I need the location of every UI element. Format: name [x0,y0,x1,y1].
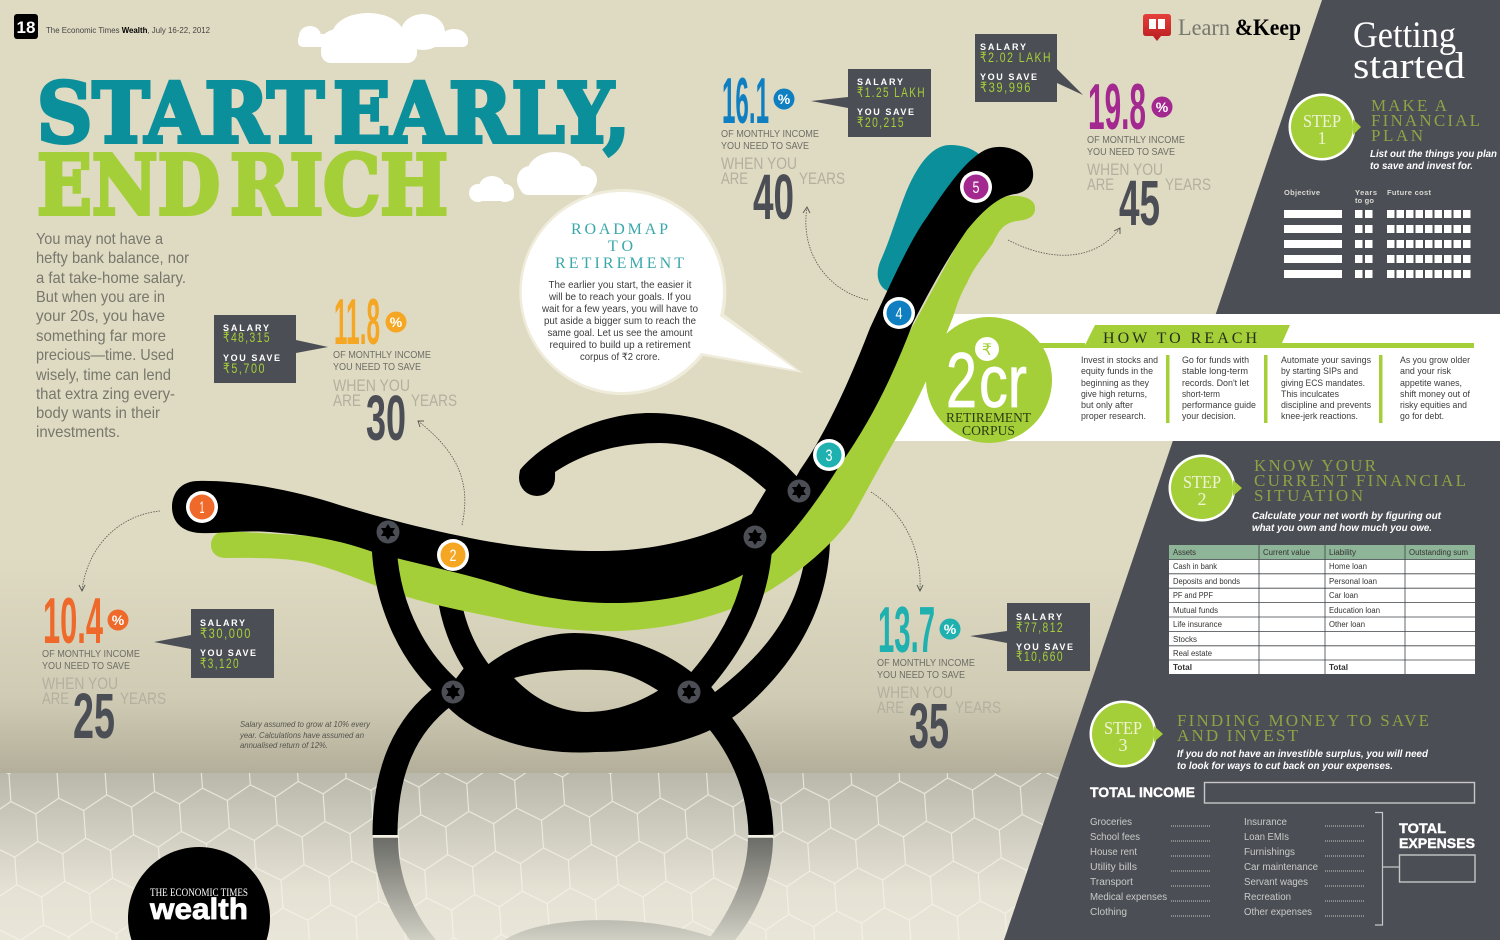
salary callout [214,315,328,383]
column 4 [1400,355,1470,422]
column dividers [1166,355,1382,423]
net worth table: Education loan [1329,606,1380,615]
arrow 3 [871,492,923,591]
net worth table: Car loan [1329,591,1358,600]
bracket [1375,812,1399,925]
cloud: mid right [517,152,597,195]
column 1: beginning as they [1081,378,1149,389]
intro text: that extra zing every- [36,386,175,403]
column 1: Invest in stocks and [1081,355,1158,366]
page tag: 18 [17,18,35,37]
description: YOU NEED TO SAVE [1087,147,1175,158]
green heading ribbon [1040,325,1474,348]
step 2 [1168,454,1475,674]
roadmap speech bubble: corpus of ₹2 crore. [580,352,660,363]
column 4: shift money out of [1400,389,1470,400]
marker 2 [437,539,469,571]
net worth table: Mutual funds [1173,606,1218,615]
salary callout: ₹30,000 [200,625,252,641]
intro text: But when you are in [36,289,165,306]
heading: getting started: started [1353,46,1466,87]
expense list: Other expenses [1244,907,1312,918]
net worth table: Stocks [1173,635,1197,644]
roadmap speech bubble: wait for a few years, you will have to [541,304,698,315]
corpus badge: CORPUS [962,424,1015,439]
intro text: investments. [36,424,120,441]
roadmap speech bubble: will be to reach your goals. If you [548,292,691,303]
percent badge [386,312,406,332]
column 3: This inculcates [1281,389,1339,400]
column 4: appetite wanes, [1400,378,1462,389]
intro text: precious—time. Used [36,347,174,364]
description [1087,135,1185,158]
step heading: FINANCIAL [1371,111,1480,130]
column 1: give high returns, [1081,389,1147,400]
stat: age 30 [214,285,457,454]
percent badge [774,88,794,110]
description: OF MONTHLY INCOME [1087,135,1185,146]
net worth table: Total [1329,663,1348,672]
total expenses: TOTAL [1399,820,1446,836]
salary callout: YOU SAVE [223,353,280,363]
age: YEARS [411,391,457,410]
net worth table: Assets [1173,548,1196,557]
net worth table: Life insurance [1173,620,1223,629]
corpus badge: RETIREMENT [946,411,1031,426]
step heading [1177,711,1429,745]
step description: Calculate your net worth by figuring out [1252,511,1442,522]
total income [1090,782,1474,803]
roadmap speech bubble: ROADMAP [571,221,668,238]
stat: age 35: 13.7 [878,593,935,666]
total income: TOTAL INCOME [1090,784,1195,800]
plan table headers [1284,188,1432,205]
stat: age 35 [877,593,1090,762]
age: 25 [73,680,115,752]
lower ring and rear arc [440,530,830,753]
plan table headers: Years [1355,188,1377,197]
roadmap speech bubble: TO [608,238,633,255]
roadmap speech bubble [519,189,803,395]
step description [1370,149,1497,172]
net worth table: Other loan [1329,620,1365,629]
column 1: proper research. [1081,411,1146,422]
age: WHEN YOU [333,376,410,395]
bench rear legs and seat backing [440,413,830,753]
rupee icon: ₹ [982,342,992,359]
stat: age 40: 16.1 [722,64,769,137]
stat: age 25: 10.4 [43,584,103,657]
column 1 [1081,355,1158,422]
dark sidebar panel [1004,0,1500,940]
percent badge: % [390,314,403,330]
column 2: performance guide [1182,400,1256,411]
learn and keep logo: &Keep [1235,15,1301,40]
salary callout [811,69,931,137]
age [42,674,166,752]
salary callout [975,34,1083,102]
description: YOU NEED TO SAVE [42,661,130,672]
marker 1 [186,491,218,523]
step 3 [1090,700,1475,925]
expense list: Medical expenses [1090,892,1167,903]
note: year. Calculations have assumed an [239,731,365,740]
net worth table: Home loan [1329,562,1367,571]
percent badge: % [112,612,125,628]
arrow 4 [803,207,868,300]
net worth table: Outstanding sum [1409,548,1468,557]
expense list: Groceries [1090,817,1132,828]
age: ARE [42,689,69,708]
bench reflection [373,838,773,940]
step badge: STEP [1303,111,1341,131]
marker 2: 2 [450,546,456,565]
step badge [1090,700,1163,768]
description [721,129,819,152]
cloud: mid small [469,176,514,202]
cloud: top [298,13,468,63]
title: RICH [230,138,448,234]
salary callout: ₹1.25 LAKH [857,84,926,100]
age: WHEN YOU [42,674,118,693]
tiled floor [0,773,1500,940]
age: 40 [753,161,794,233]
stat: age 45: 19.8 [1088,70,1146,143]
description [877,658,975,681]
step badge: 1 [1318,128,1326,148]
salary callout [154,609,274,678]
step heading [1371,96,1480,145]
age: ARE [333,391,361,410]
step heading: KNOW YOUR [1254,456,1377,475]
description: OF MONTHLY INCOME [42,649,140,660]
wealth logo [128,847,270,940]
arrow 2 [418,421,465,525]
percent badge: % [1156,99,1169,115]
column 4: and your risk [1400,366,1451,377]
arrow 1 [79,511,160,591]
page tag [14,14,211,39]
marker 5: 5 [972,178,980,197]
wealth logo: wealth [149,893,248,926]
bench bolts [376,480,810,704]
step 1 [1284,94,1497,278]
wealth logo: THE ECONOMIC TIMES [150,887,248,899]
column 2: short-term [1182,389,1220,400]
heading text: HOW TO REACH [1103,330,1257,347]
salary callout: YOU SAVE [857,107,914,117]
salary callout: ₹77,812 [1016,619,1064,635]
step heading: CURRENT FINANCIAL [1254,471,1466,490]
learn and keep logo: Learn [1178,15,1230,40]
age: YEARS [799,169,845,188]
net worth table: Real estate [1173,649,1213,658]
step badge [1288,94,1361,160]
title: START [37,66,324,162]
net worth table: Personal loan [1329,577,1377,586]
salary callout: YOU SAVE [1016,642,1073,652]
salary callout: ₹48,315 [223,329,271,345]
marker 3 [813,439,845,471]
description: OF MONTHLY INCOME [877,658,975,669]
age: WHEN YOU [1087,160,1163,179]
step description [1177,749,1429,772]
expense list: Transport [1090,877,1133,888]
step badge: 3 [1118,735,1128,755]
expense list: School fees [1090,832,1140,843]
salary callout: YOU SAVE [980,72,1037,82]
note: annualised return of 12%. [240,741,328,750]
age [877,683,1001,762]
column 2: stable long-term [1182,366,1248,377]
age: YEARS [120,689,166,708]
plan table rows [1284,210,1470,278]
marker 3: 3 [826,446,832,465]
teal backrest slat [878,145,980,292]
stat: age 25 [42,584,274,752]
corpus badge: 2 [946,336,977,424]
how to reach band [880,314,1500,441]
expense list: House rent [1090,847,1137,858]
learn and keep logo [1143,14,1301,41]
salary callout: ₹2.02 LAKH [980,49,1052,65]
icon: book [1143,14,1171,41]
column 2: Go for funds with [1182,355,1249,366]
roadmap speech bubble: RETIREMENT [555,255,684,272]
step heading [1254,456,1466,505]
roadmap speech bubble: The earlier you start, the easier it [548,280,692,291]
intro text: a fat take-home salary. [36,270,186,287]
net worth table: Cash in bank [1173,562,1218,571]
column 3: discipline and prevents [1281,400,1371,411]
step description: to save and invest for. [1370,161,1473,172]
age: WHEN YOU [721,154,797,173]
description: OF MONTHLY INCOME [333,350,431,361]
column 3: knee-jerk reactions. [1281,411,1358,422]
stat: age 40 [721,64,931,233]
note: Salary assumed to grow at 10% every [240,720,371,729]
marker 4: 4 [896,304,902,323]
column 4: risky equities and [1400,400,1467,411]
marker 5 [960,171,992,203]
column 2: your decision. [1182,411,1236,422]
intro text: body wants in their [36,405,161,422]
expense list: Clothing [1090,907,1127,918]
expense list: Utility bills [1090,862,1137,873]
net worth table: Current value [1263,548,1311,557]
description: YOU NEED TO SAVE [333,362,421,373]
net worth table [1169,545,1475,674]
note [239,720,371,750]
plan table headers: Objective [1284,188,1320,197]
salary callout [970,603,1090,671]
expense list [1090,817,1365,918]
expense list: Car maintenance [1244,862,1318,873]
age: ARE [877,698,904,717]
heading: getting started [1353,15,1466,87]
column 2 [1182,355,1256,422]
salary callout: SALARY [980,42,1026,52]
description: OF MONTHLY INCOME [721,129,819,140]
step badge: 2 [1198,489,1206,509]
description: YOU NEED TO SAVE [877,670,965,681]
arrow 5 [1008,228,1120,255]
salary callout: ₹3,120 [200,655,240,671]
column 3: giving ECS mandates. [1281,378,1365,389]
age [1087,160,1211,239]
step description: List out the things you plan [1370,149,1497,160]
column 2: records. Don't let [1182,378,1249,389]
description [42,649,140,672]
inner leg [448,590,490,684]
total expenses: EXPENSES [1399,835,1475,851]
expense list: Insurance [1244,817,1287,828]
percent badge [108,610,128,630]
armrest [519,413,800,525]
plan table headers: to go [1355,196,1374,205]
step heading: PLAN [1371,126,1423,145]
intro text: your 20s, you have [36,308,165,325]
net worth table: Liability [1329,548,1356,557]
column 3: Automate your savings [1281,355,1371,366]
corpus badge: cr [979,340,1027,423]
percent badge: % [944,621,957,637]
salary callout: ₹39,996 [980,79,1032,95]
upper ring band [470,633,695,695]
salary callout: ₹5,700 [223,360,266,376]
step heading: AND INVEST [1177,726,1299,745]
salary callout: ₹20,215 [857,114,905,130]
expense list: Recreation [1244,892,1291,903]
column 1: equity funds in the [1081,366,1153,377]
salary callout: SALARY [223,323,269,333]
stat: age 30: 11.8 [334,285,380,358]
age: 30 [366,382,406,454]
age: YEARS [1165,175,1211,194]
age: ARE [1087,175,1114,194]
description: YOU NEED TO SAVE [721,141,809,152]
roadmap speech bubble: required to build up a retirement [550,340,691,351]
bench black seat and back [172,147,1033,603]
column 3 [1281,355,1371,422]
title [37,66,630,234]
step description: If you do not have an investible surplus, you will need [1177,749,1429,760]
stat: age 45 [975,34,1211,239]
expense list: Furnishings [1244,847,1295,858]
step description [1252,511,1442,534]
salary callout: SALARY [200,618,245,628]
corpus badge [926,317,1052,443]
floor highlight at leg feet [373,835,773,837]
intro text: wisely, time can lend [35,367,171,384]
column 4: go for debt. [1400,411,1444,422]
salary callout: YOU SAVE [200,648,256,658]
age: ARE [721,169,748,188]
step badge: STEP [1183,472,1221,492]
age [721,154,845,233]
column 4: As you grow older [1400,355,1470,366]
salary callout: ₹10,660 [1016,648,1064,664]
title: EARLY, [333,66,630,162]
intro text [35,231,190,441]
net worth table: Total [1173,663,1192,672]
step heading: SITUATION [1254,486,1363,505]
total expenses [1399,820,1475,882]
expense list: Loan EMIs [1244,832,1289,843]
title: END [37,138,220,234]
step badge: STEP [1104,718,1142,738]
marker 4 [883,297,915,329]
expense list: Servant wages [1244,877,1308,888]
column 1: but only after [1081,400,1133,411]
salary callout: SALARY [857,77,903,87]
bench front legs [384,540,761,835]
percent badge [940,618,960,640]
marker 1: 1 [200,498,204,517]
step description: what you own and how much you owe. [1252,523,1432,534]
description [333,350,431,373]
age: 45 [1119,167,1160,239]
net worth table: Deposits and bonds [1173,577,1240,586]
net worth table: PF and PPF [1173,591,1213,600]
age [333,376,457,454]
age: WHEN YOU [877,683,953,702]
intro text: hefty bank balance, nor [36,250,190,267]
salary callout: SALARY [1016,612,1062,622]
page tag: The Economic Times Wealth, July 16-22, 2012 [46,26,211,35]
step description: to look for ways to cut back on your expenses. [1177,761,1393,772]
age: 35 [909,690,949,762]
green seat slat [211,196,1035,631]
step heading: FINDING MONEY TO SAVE [1177,711,1429,730]
intro text: You may not have a [36,231,163,248]
intro text: something far more [36,328,166,345]
plan table headers: Future cost [1387,188,1432,197]
percent badge [1152,96,1172,118]
percent badge: % [778,91,791,107]
armrest end cap [519,460,555,496]
step badge [1168,454,1242,522]
roadmap speech bubble: same goal. Let us see the amount [548,328,693,339]
age: YEARS [955,698,1001,717]
heading: getting started: Getting [1353,15,1456,56]
roadmap speech bubble: put aside a bigger sum to reach the [544,316,696,327]
step heading: MAKE A [1371,96,1448,115]
column 3: by starting SIPs and [1281,366,1358,377]
